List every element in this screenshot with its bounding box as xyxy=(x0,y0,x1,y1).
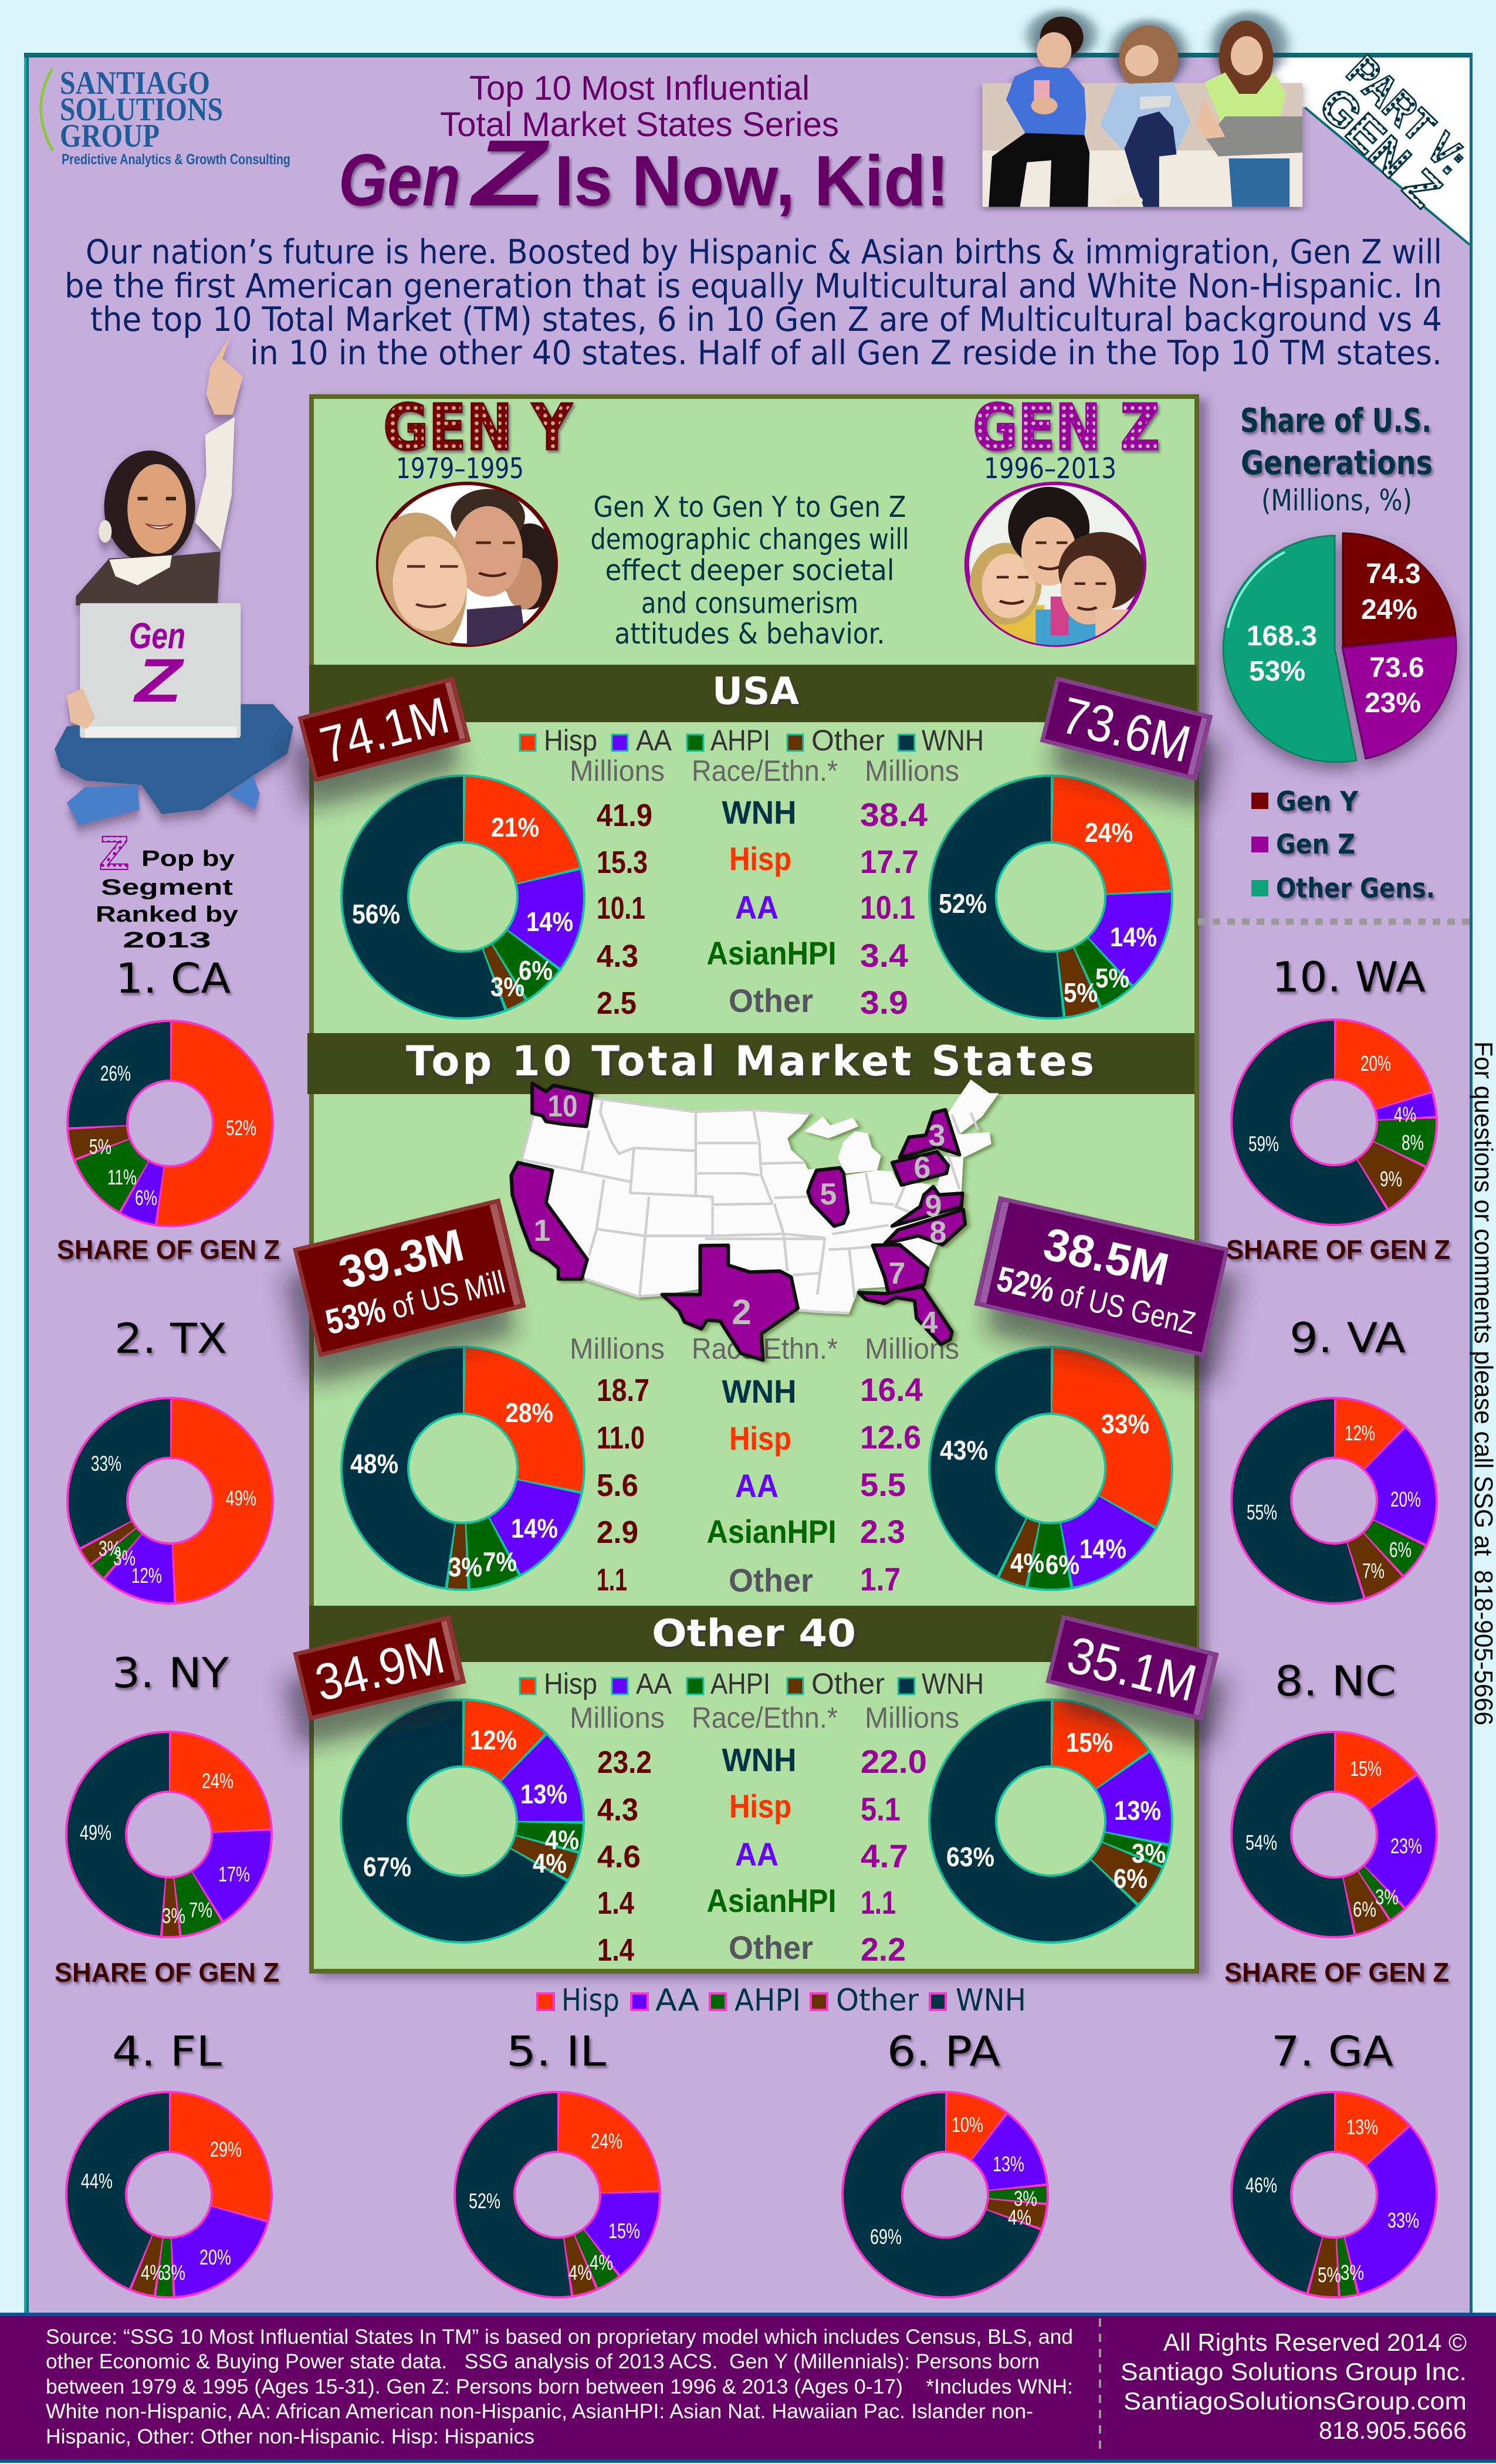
chart: Other 40 Gen Y donut: 12% xyxy=(470,1725,517,1755)
band: Top 10 Total Market States xyxy=(307,1033,1194,1094)
callout: 35.1M: 35.1M xyxy=(1062,1625,1202,1712)
state 8: North Carolina: 54% xyxy=(1245,1830,1277,1854)
chart: Top 10 Gen Z donut xyxy=(929,1347,1172,1590)
chart panel: share of U.S. generations: 23% xyxy=(1365,688,1421,719)
table: Other 40 millions: 4.3 xyxy=(597,1792,638,1827)
chart: Top 10 Gen Y donut: 14% xyxy=(511,1513,558,1544)
bottom legend: WNH xyxy=(956,1983,1026,2018)
table: Other 40 millions: 5.1 xyxy=(861,1791,901,1827)
table: Top 10 millions xyxy=(570,1332,959,1599)
chart: Top 10 Gen Z donut: 14% xyxy=(1079,1534,1126,1564)
state 8: North Carolina: 6% xyxy=(1353,1897,1376,1921)
state 3: New York: 3% xyxy=(162,1904,185,1928)
table: Top 10 millions: 16.4 xyxy=(860,1371,923,1408)
legend: USA segments xyxy=(520,724,984,757)
table: Top 10 millions: 12.6 xyxy=(860,1419,921,1456)
intro paragraph: in 10 in the other 40 states. Half of all Gen Z reside in the Top 10 TM states. xyxy=(250,334,1442,373)
text block: generational change xyxy=(590,490,909,651)
state 5: Illinois xyxy=(455,2028,660,2297)
state 3: New York: 24% xyxy=(202,1769,233,1793)
legend: Other 40 segments: Other xyxy=(811,1667,885,1700)
state 7: Georgia: 46% xyxy=(1245,2173,1277,2197)
map: top 10 total market states: 10 xyxy=(548,1089,577,1123)
state 8: North Carolina: 3% xyxy=(1375,1885,1399,1909)
heading: Gen Z: 1996–2013 xyxy=(984,452,1116,485)
chart: Other 40 Gen Y donut: 4% xyxy=(545,1825,579,1855)
table: USA millions: 3.9 xyxy=(860,984,908,1021)
map: top 10 total market states: 4 xyxy=(921,1306,938,1340)
chart: USA Gen Y donut: 14% xyxy=(526,906,573,937)
legend: USA segments: Other xyxy=(811,724,885,757)
map: top 10 total market states: 5 xyxy=(820,1177,837,1211)
pie: generations share xyxy=(1223,533,1456,762)
legend: generations: Gen Y xyxy=(1276,786,1359,817)
state 10: Washington: 20% xyxy=(1360,1051,1391,1075)
callout: 38.5M 52% of US GenZ xyxy=(977,1199,1227,1355)
state 5: Illinois: 24% xyxy=(591,2129,622,2153)
illustration: girl raising hand with laptop xyxy=(55,335,293,825)
callout: 39.3M 53% of US Mill: 39.3M xyxy=(334,1219,469,1298)
legend: generations: Other Gens. xyxy=(1276,872,1435,904)
chart: Other 40 Gen Z donut: 6% xyxy=(1113,1863,1148,1894)
legend: generations: Gen Z xyxy=(1276,828,1355,860)
bottom legend: AA xyxy=(655,1983,699,2018)
chart: USA Gen Z donut: 5% xyxy=(1064,977,1098,1008)
table: Top 10 millions: 2.9 xyxy=(597,1515,638,1550)
table: USA millions: 2.5 xyxy=(597,986,637,1021)
state 2: Texas: 49% xyxy=(226,1486,256,1510)
table: USA millions: 10.1 xyxy=(860,889,915,926)
text block: rights and contact: All Rights Reserved 2014 © xyxy=(1163,2328,1467,2356)
table: USA millions xyxy=(570,754,959,1021)
table: Top 10 millions: Other xyxy=(729,1562,813,1599)
text block: rights and contact: SantiagoSolutionsGroup.com xyxy=(1123,2387,1467,2415)
state 2: Texas: 12% xyxy=(131,1563,162,1588)
map: top 10 total market states: 6 xyxy=(914,1151,930,1185)
caption: Z Pop by Segment Ranked by 2013: 2013 xyxy=(123,928,211,953)
state 1: California: 6% xyxy=(135,1186,157,1210)
state 9: Virginia: 7% xyxy=(1362,1559,1385,1583)
chart: Top 10 Gen Y donut xyxy=(341,1347,584,1590)
state 4: Florida: 4. FL xyxy=(112,2028,222,2076)
state 8: North Carolina: 23% xyxy=(1390,1834,1422,1858)
band: Other 40 xyxy=(309,1606,1197,1662)
text block: source notes: between 1979 & 1995 (Ages 15-31). Gen Z: Persons born between 1996 & 2013 (Ages 0-17) *Includes WNH: xyxy=(46,2375,1073,2398)
state 9: Virginia: 9. VA xyxy=(1289,1314,1406,1362)
state 7: Georgia: 33% xyxy=(1387,2208,1419,2232)
title block: Z xyxy=(469,120,550,225)
chart: Top 10 Gen Y donut: 48% xyxy=(350,1448,398,1479)
table: Top 10 millions: AsianHPI xyxy=(706,1513,837,1550)
state 10: Washington: 8% xyxy=(1402,1131,1424,1155)
legend: generations xyxy=(1251,786,1435,904)
state 3: New York: 17% xyxy=(218,1862,250,1886)
state 4: Florida xyxy=(66,2028,272,2297)
state 1: California: SHARE OF GEN Z xyxy=(57,1234,280,1265)
legend: Other 40 segments xyxy=(520,1667,984,1700)
heading: Gen Z: GEN Z xyxy=(973,391,1160,465)
text block: source notes: other Economic & Buying Power state data. SSG analysis of 2013 ACS. Gen Y (Millennials): Persons born xyxy=(46,2350,1040,2373)
state 1: California: 26% xyxy=(100,1061,131,1085)
state 5: Illinois: 4% xyxy=(590,2250,613,2275)
caption: Z Pop by Segment Ranked by 2013: Segment xyxy=(101,875,233,900)
state 6: Pennsylvania: 3% xyxy=(1014,2187,1037,2211)
state 6: Pennsylvania: 6. PA xyxy=(887,2028,1000,2076)
chart: USA Gen Y donut xyxy=(341,776,584,1018)
table: Top 10 millions: Hisp xyxy=(729,1420,791,1457)
text block: generational change: Gen X to Gen Y to Gen Z xyxy=(594,490,906,524)
corner fold: Part V Gen Z: GEN Z xyxy=(1309,77,1451,218)
table: Other 40 millions: 1.4 xyxy=(597,1886,634,1921)
callout: 73.6M: 73.6M xyxy=(1056,686,1196,773)
text block: rights and contact: Santiago Solutions Group Inc. xyxy=(1121,2358,1467,2385)
legend: Other 40 segments: AHPI xyxy=(710,1667,770,1700)
chart panel: share of U.S. generations: 53% xyxy=(1249,656,1305,687)
caption: Z Pop by Segment Ranked by 2013 xyxy=(96,827,238,953)
state 4: Florida: 20% xyxy=(199,2245,231,2269)
chart: Other 40 Gen Y donut: 4% xyxy=(533,1848,567,1879)
table: Top 10 millions: 18.7 xyxy=(597,1373,649,1408)
panel: Gen Y vs Gen Z comparison xyxy=(307,391,1197,1971)
state 4: Florida: 44% xyxy=(81,2169,113,2193)
state 1: California: 11% xyxy=(107,1165,137,1189)
state 9: Virginia xyxy=(1231,1314,1437,1603)
state 8: North Carolina: 8. NC xyxy=(1275,1657,1396,1705)
band: Top 10 Total Market States: Top 10 Total Market States xyxy=(406,1037,1094,1085)
chart panel: share of U.S. generations: (Millions, %) xyxy=(1261,483,1412,517)
table: Top 10 millions: 1.7 xyxy=(860,1561,901,1597)
table: USA millions: 4.3 xyxy=(597,939,638,974)
photo: three kids on sofa xyxy=(983,10,1302,207)
title block: Is Now, Kid! xyxy=(554,141,949,221)
corner fold: Part V Gen Z xyxy=(1244,46,1477,245)
chart: USA Gen Z donut xyxy=(929,776,1172,1018)
chart: Top 10 Gen Z donut: 43% xyxy=(940,1435,988,1465)
caption: Z Pop by Segment Ranked by 2013: Z xyxy=(99,827,129,880)
state 5: Illinois: 4% xyxy=(568,2260,592,2284)
table: Other 40 millions: Millions xyxy=(865,1701,959,1734)
state 2: Texas: 2. TX xyxy=(114,1315,227,1363)
chart: Top 10 Gen Z donut: 33% xyxy=(1101,1409,1149,1439)
table: Other 40 millions: AsianHPI xyxy=(706,1882,837,1919)
state 2: Texas: 33% xyxy=(91,1451,121,1475)
table: USA millions: Race/Ethn.* xyxy=(692,754,838,787)
table: USA millions: 38.4 xyxy=(860,796,928,833)
chart: USA Gen Y donut: 21% xyxy=(491,812,539,842)
table: Top 10 millions: Millions xyxy=(865,1332,959,1365)
text block: source notes: Source: “SSG 10 Most Influential States In TM” is based on proprietary model which includes Census, BLS, and xyxy=(46,2326,1073,2348)
corner fold: Part V Gen Z: PART V: xyxy=(1338,46,1477,184)
logo: Santiago Solutions Group: SANTIAGO xyxy=(60,65,210,101)
state 10: Washington: 4% xyxy=(1394,1102,1416,1126)
table: Other 40 millions: WNH xyxy=(722,1741,797,1778)
table: USA millions: AA xyxy=(735,889,779,926)
map: top 10 total market states: 1 xyxy=(534,1214,550,1248)
table: Other 40 millions: 1.1 xyxy=(861,1884,896,1921)
text block: rights and contact: 818.905.5666 xyxy=(1319,2416,1467,2444)
chart: USA Gen Y donut: 3% xyxy=(490,972,524,1002)
chart: Other 40 Gen Y donut: 67% xyxy=(363,1852,411,1882)
map: top 10 total market states: 8 xyxy=(930,1216,946,1250)
table: USA millions: AsianHPI xyxy=(706,935,837,972)
state 5: Illinois: 5. IL xyxy=(506,2028,606,2076)
bottom legend xyxy=(537,1983,1026,2018)
chart panel: share of U.S. generations: 168.3 xyxy=(1247,621,1317,652)
state 9: Virginia: 55% xyxy=(1247,1500,1277,1524)
table: Other 40 millions: Race/Ethn.* xyxy=(692,1701,838,1734)
callout: 38.5M 52% of US GenZ: 52% of US GenZ xyxy=(993,1259,1200,1342)
chart: Other 40 Gen Z donut: 63% xyxy=(946,1842,994,1872)
table: Other 40 millions: Hisp xyxy=(729,1788,791,1825)
chart: Other 40 Gen Y donut: 13% xyxy=(520,1779,567,1809)
table: Top 10 millions: Millions xyxy=(570,1332,665,1365)
chart panel: share of U.S. generations: 74.3 xyxy=(1366,559,1421,590)
state 4: Florida: 29% xyxy=(210,2137,242,2161)
state 9: Virginia: 20% xyxy=(1390,1487,1421,1511)
chart: Other 40 Gen Y donut xyxy=(341,1700,584,1942)
state 7: Georgia: 7. GA xyxy=(1271,2028,1393,2076)
chart: USA Gen Y donut: 56% xyxy=(352,899,400,929)
text block: source notes xyxy=(46,2326,1073,2448)
table: Other 40 millions: 22.0 xyxy=(861,1743,927,1780)
state 7: Georgia: 5% xyxy=(1318,2263,1341,2287)
map: top 10 total market states: 3 xyxy=(929,1119,945,1153)
title block: Total Market States Series xyxy=(440,106,839,144)
illustration: girl raising hand with laptop: Gen xyxy=(129,616,185,656)
logo: Santiago Solutions Group: GROUP xyxy=(60,118,160,154)
title block xyxy=(339,69,949,225)
callout: 38.5M 52% of US GenZ: 38.5M xyxy=(1039,1217,1173,1295)
state 4: Florida: 3% xyxy=(162,2260,185,2284)
chart panel: share of U.S. generations xyxy=(1223,402,1456,904)
photo: Gen Y group xyxy=(375,482,558,647)
state 7: Georgia xyxy=(1231,2028,1437,2297)
legend: Other 40 segments: AA xyxy=(636,1667,672,1700)
chart panel: share of U.S. generations: Generations xyxy=(1241,444,1433,482)
caption: Z Pop by Segment Ranked by 2013: Pop by xyxy=(141,847,235,871)
state 3: New York: 49% xyxy=(80,1820,111,1844)
state 3: New York: SHARE OF GEN Z xyxy=(55,1957,279,1988)
map: top 10 total market states: 2 xyxy=(732,1292,752,1332)
heading: Gen Y: 1979–1995 xyxy=(396,452,524,485)
table: Top 10 millions: 11.0 xyxy=(597,1420,645,1456)
chart: Other 40 Gen Z donut: 3% xyxy=(1132,1838,1166,1869)
state 2: Texas: 3% xyxy=(99,1536,121,1561)
table: USA millions: 10.1 xyxy=(597,891,645,926)
chart: Other 40 Gen Z donut: 15% xyxy=(1066,1727,1113,1758)
state 7: Georgia: 13% xyxy=(1346,2115,1378,2139)
state 5: Illinois: 15% xyxy=(608,2219,640,2243)
callout: 74.1M: 74.1M xyxy=(314,686,455,774)
table: Other 40 millions: Millions xyxy=(570,1701,665,1734)
state 2: Texas: 3% xyxy=(113,1546,136,1570)
state 10: Washington: 10. WA xyxy=(1272,953,1426,1001)
text block: rights and contact xyxy=(1121,2328,1467,2444)
caption: Z Pop by Segment Ranked by 2013: Ranked by xyxy=(96,902,238,927)
chart: USA Gen Z donut: 5% xyxy=(1095,963,1129,993)
table: USA millions: Hisp xyxy=(729,840,791,877)
text block: generational change: effect deeper societal xyxy=(605,554,894,587)
table: Other 40 millions: 4.6 xyxy=(597,1839,641,1874)
table: Top 10 millions: 2.3 xyxy=(860,1513,905,1550)
band: USA xyxy=(309,665,1197,722)
chart panel: share of U.S. generations: 24% xyxy=(1361,594,1417,625)
state 9: Virginia: 6% xyxy=(1389,1538,1412,1562)
table: Other 40 millions: 2.2 xyxy=(861,1931,906,1968)
table: USA millions: Other xyxy=(729,982,813,1019)
table: USA millions: WNH xyxy=(722,794,797,831)
chart panel: share of U.S. generations: 73.6 xyxy=(1369,652,1424,683)
state 8: North Carolina: 15% xyxy=(1350,1756,1382,1781)
state 10: Washington: 59% xyxy=(1248,1132,1279,1156)
state 9: Virginia: 12% xyxy=(1345,1421,1375,1445)
table: Top 10 millions: WNH xyxy=(722,1373,797,1410)
table: USA millions: Millions xyxy=(865,754,959,787)
chart panel: share of U.S. generations: Share of U.S. xyxy=(1240,402,1431,440)
logo: Santiago Solutions Group: Predictive Analytics & Growth Consulting xyxy=(62,151,290,168)
logo: Santiago Solutions Group xyxy=(41,65,290,168)
state 3: New York xyxy=(55,1649,279,1988)
table: USA millions: 17.7 xyxy=(860,843,919,880)
state 8: North Carolina xyxy=(1224,1657,1449,1988)
state 10: Washington: 9% xyxy=(1380,1167,1402,1191)
table: Other 40 millions: 1.4 xyxy=(597,1932,634,1968)
title block: Gen xyxy=(339,140,461,221)
table: Other 40 millions: 4.7 xyxy=(861,1837,908,1874)
band: USA: USA xyxy=(712,670,799,713)
footer band xyxy=(0,2313,1496,2463)
chart: Other 40 Gen Z donut xyxy=(929,1700,1172,1942)
chart: Top 10 Gen Z donut: 6% xyxy=(1045,1549,1079,1580)
state 3: New York: 3. NY xyxy=(112,1649,229,1697)
state 1: California: 1. CA xyxy=(116,955,231,1003)
state 10: Washington: SHARE OF GEN Z xyxy=(1226,1234,1450,1265)
map: top 10 total market states: 9 xyxy=(925,1189,942,1223)
table: Top 10 millions: 5.5 xyxy=(860,1466,906,1503)
state 4: Florida: 4% xyxy=(141,2260,164,2284)
legend: Other 40 segments: Hisp xyxy=(544,1667,597,1700)
bottom legend: Other xyxy=(836,1983,919,2018)
band: Other 40: Other 40 xyxy=(652,1612,856,1656)
text block: source notes: Hispanic, Other: Other non-Hispanic. Hisp: Hispanics xyxy=(46,2425,534,2448)
callout: 34.9M: 34.9M xyxy=(310,1626,450,1712)
heading: Gen Z xyxy=(973,391,1160,485)
table: Other 40 millions xyxy=(570,1701,959,1968)
legend: USA segments: Hisp xyxy=(544,724,597,757)
table: Other 40 millions: Other xyxy=(729,1929,813,1966)
bottom legend: AHPI xyxy=(735,1983,801,2018)
heading: Gen Y: GEN Y xyxy=(383,391,573,465)
logo: Santiago Solutions Group: SOLUTIONS xyxy=(60,92,223,128)
state 10: Washington xyxy=(1226,953,1450,1265)
state 3: New York: 7% xyxy=(189,1898,212,1922)
table: Top 10 millions: Race/Ethn.* xyxy=(692,1332,838,1365)
chart: Top 10 Gen Z donut: 4% xyxy=(1010,1548,1044,1578)
chart: Top 10 Gen Y donut: 7% xyxy=(483,1546,517,1577)
chart: USA Gen Z donut: 14% xyxy=(1110,922,1157,952)
bottom legend: Hisp xyxy=(561,1983,620,2018)
table: Other 40 millions: 23.2 xyxy=(597,1745,652,1780)
table: USA millions: 15.3 xyxy=(597,845,648,880)
text block: generational change: and consumerism xyxy=(641,587,858,620)
state 6: Pennsylvania: 4% xyxy=(1008,2205,1031,2229)
state 6: Pennsylvania: 69% xyxy=(870,2225,902,2249)
state 6: Pennsylvania: 10% xyxy=(952,2113,983,2137)
state 5: Illinois: 52% xyxy=(469,2189,500,2213)
illustration: girl raising hand with laptop: Z xyxy=(133,647,185,715)
state 1: California: 5% xyxy=(89,1135,111,1159)
legend: USA segments: AHPI xyxy=(710,724,770,757)
map: top 10 total market states xyxy=(511,1079,999,1360)
legend: USA segments: AA xyxy=(636,724,672,757)
text block: generational change: demographic changes will xyxy=(590,523,909,556)
chart: USA Gen Z donut: 52% xyxy=(939,888,987,919)
title block: Top 10 Most Influential xyxy=(469,69,810,107)
legend: Other 40 segments: WNH xyxy=(922,1667,984,1700)
state 1: California: 52% xyxy=(226,1116,256,1140)
table: Top 10 millions: AA xyxy=(735,1467,779,1504)
intro paragraph xyxy=(65,233,1442,373)
callout: 39.3M 53% of US Mill xyxy=(295,1201,524,1355)
chart: Other 40 Gen Z donut: 13% xyxy=(1114,1795,1161,1826)
callout: 39.3M 53% of US Mill: 53% of US Mill xyxy=(321,1261,509,1342)
photo: Gen Z group xyxy=(967,483,1149,648)
chart: USA Gen Z donut: 24% xyxy=(1085,817,1133,848)
table: Other 40 millions: AA xyxy=(735,1836,779,1873)
chart: Top 10 Gen Y donut: 3% xyxy=(448,1552,482,1582)
text block: source notes: White non-Hispanic, AA: African American non-Hispanic, AsianHPI: Asian Nat. Hawaiian Pac. Islander non- xyxy=(46,2400,1033,2423)
legend: USA segments: WNH xyxy=(922,724,984,757)
table: Top 10 millions: 5.6 xyxy=(597,1468,638,1503)
table: Top 10 millions: 1.1 xyxy=(597,1562,627,1597)
state 1: California xyxy=(57,955,280,1265)
table: USA millions: 41.9 xyxy=(597,798,652,833)
table: USA millions: Millions xyxy=(570,754,665,787)
state 2: Texas xyxy=(67,1315,273,1603)
map: top 10 total market states: 7 xyxy=(889,1257,905,1291)
table: USA millions: 3.4 xyxy=(860,937,908,974)
state 6: Pennsylvania xyxy=(842,2028,1048,2297)
state 8: North Carolina: SHARE OF GEN Z xyxy=(1224,1957,1449,1988)
chart: USA Gen Y donut: 6% xyxy=(519,955,553,986)
chart: Top 10 Gen Y donut: 28% xyxy=(505,1397,553,1428)
text block: generational change: attitudes & behavior. xyxy=(615,617,885,651)
state 6: Pennsylvania: 13% xyxy=(993,2152,1024,2176)
state 7: Georgia: 3% xyxy=(1341,2260,1364,2284)
